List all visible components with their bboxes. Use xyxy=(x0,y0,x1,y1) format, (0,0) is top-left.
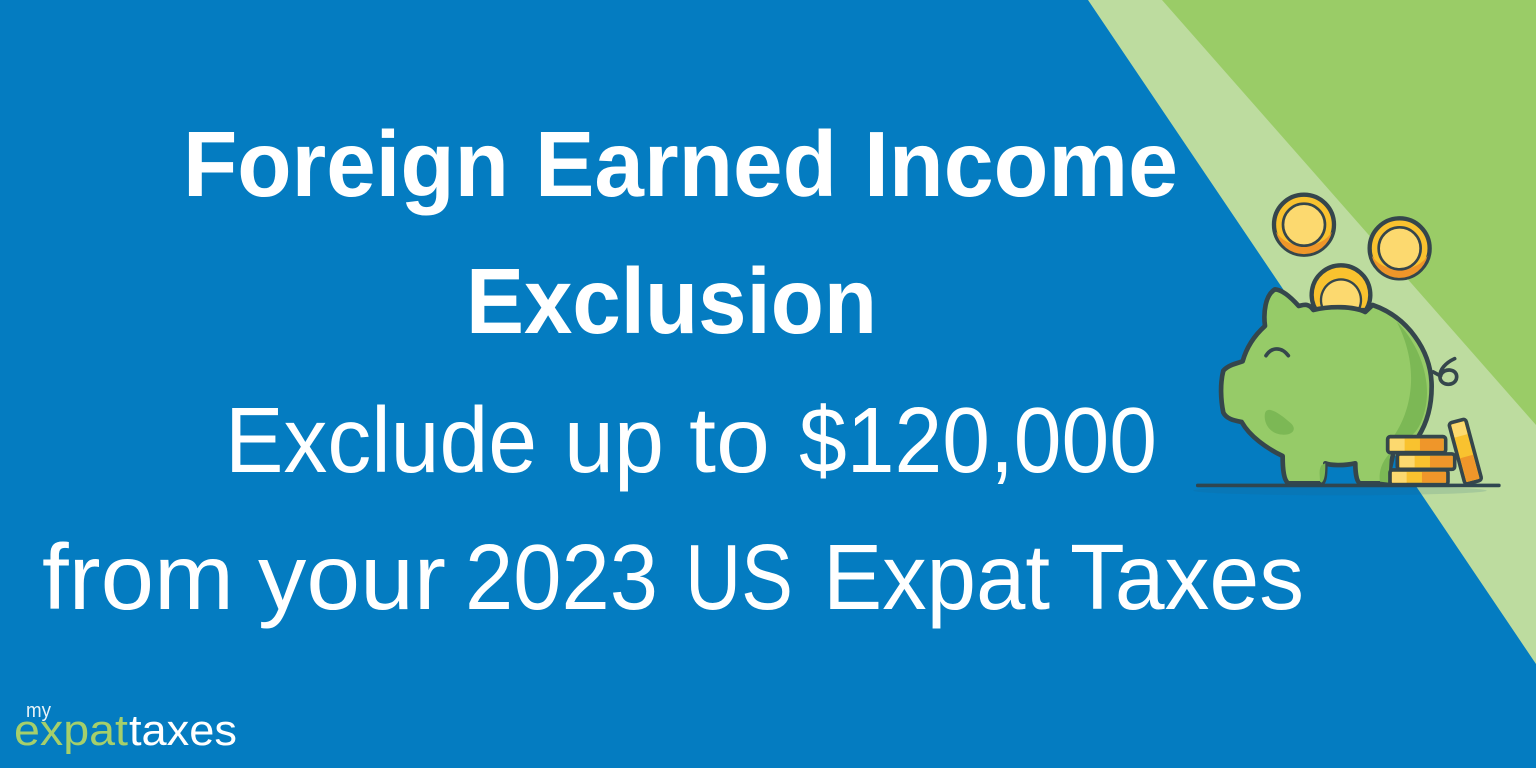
icon: pig body xyxy=(1221,289,1432,483)
subtitle: Expat xyxy=(823,525,1050,629)
icon: ground line xyxy=(1196,484,1501,487)
subtitle xyxy=(42,388,1304,629)
subtitle: your xyxy=(258,525,446,629)
icon: pig eye xyxy=(1266,349,1288,356)
subtitle: to xyxy=(689,388,770,492)
title: Exclusion xyxy=(466,249,877,353)
icon: coin entering slot xyxy=(1312,265,1370,310)
subtitle: Exclude xyxy=(225,388,537,492)
icon: coin stack highlights xyxy=(1390,421,1479,483)
title xyxy=(183,112,1178,353)
icon: pig tail xyxy=(1433,359,1457,384)
logo: taxes xyxy=(129,706,237,755)
logo: my xyxy=(26,700,51,722)
title: Income xyxy=(864,112,1178,216)
logo xyxy=(14,700,237,755)
title: Foreign xyxy=(183,112,509,216)
subtitle: 2023 xyxy=(465,525,658,629)
panel: green corner xyxy=(1162,0,1536,425)
icon: pig leg shading xyxy=(1320,453,1390,483)
logo: expat xyxy=(14,706,128,755)
icon: ground shadow xyxy=(1193,486,1487,495)
subtitle: US xyxy=(685,525,793,629)
icon: coin stack xyxy=(1388,419,1482,485)
panel: light green diagonal band xyxy=(1088,0,1536,664)
icon: pig cheek xyxy=(1265,410,1294,435)
icon: pig body shading xyxy=(1393,322,1427,437)
icon: falling coin right xyxy=(1370,218,1430,278)
subtitle: $120,000 xyxy=(799,388,1157,492)
icon: piggy bank with coins xyxy=(1193,195,1501,495)
subtitle: from xyxy=(42,525,234,629)
subtitle: Taxes xyxy=(1070,525,1304,629)
subtitle: up xyxy=(564,388,664,492)
title: Earned xyxy=(535,112,837,216)
icon: falling coin left xyxy=(1274,195,1334,255)
